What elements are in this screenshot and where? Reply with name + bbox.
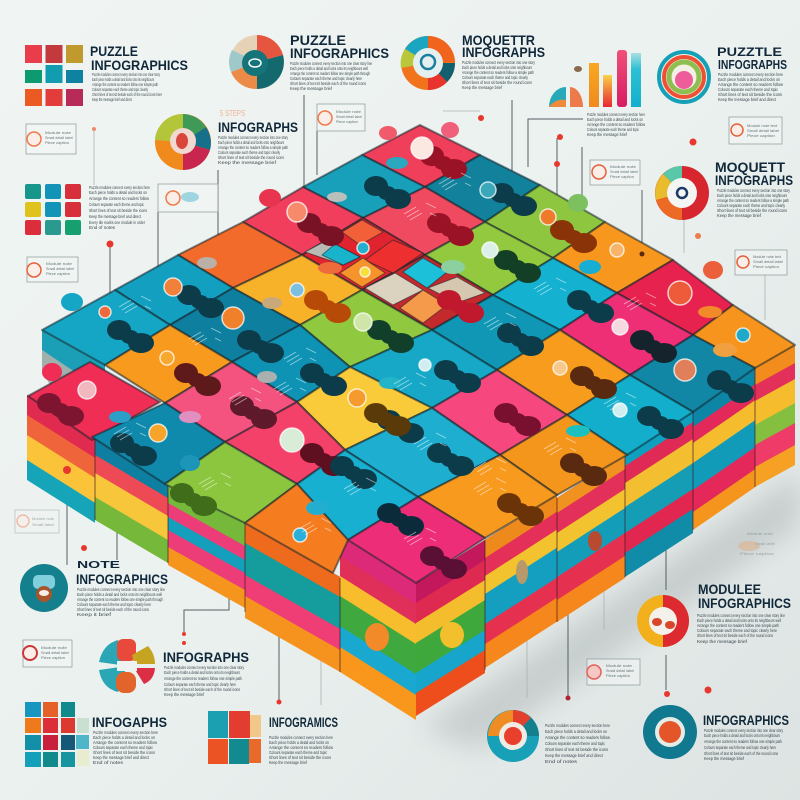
callout: top right: Piece caption	[747, 134, 775, 138]
heading: INFOGAPHS	[92, 714, 167, 730]
text block	[462, 60, 535, 91]
text block: End of notes	[93, 760, 124, 766]
heading: MOQUETT	[715, 159, 785, 175]
text block	[290, 61, 372, 92]
centre small pieces	[305, 220, 485, 323]
text block: Arrange the content so readers follow one simple path through	[77, 597, 163, 603]
callout: left lower: Piece caption	[46, 272, 70, 276]
pie chart	[401, 36, 455, 90]
text block: Arrange the content so readers follow a simple path	[218, 145, 288, 151]
panel: middle left infographics	[155, 109, 298, 170]
stack shadow	[420, 472, 800, 750]
text block: Colours separate each theme and topic	[545, 741, 605, 747]
heading: INFOGRAPHICS	[290, 45, 389, 61]
text block: Keep the message brief and direct	[718, 97, 777, 103]
callout: bottom centre: Small detail label	[606, 669, 634, 673]
callout: top centre left	[317, 104, 365, 131]
callout: top centre right: Piece caption	[610, 175, 634, 179]
panel: top right puzzle	[657, 45, 787, 104]
callout: right middle: Small detail label	[753, 260, 783, 264]
text block: Keep the message brief	[697, 639, 748, 645]
callout: bottom centre	[587, 659, 640, 685]
text block: Keep the message brief and direct	[89, 214, 141, 220]
text block: End of notes	[545, 759, 578, 765]
circle chart	[643, 705, 697, 759]
text block: Short lines of text sit beside the round icons	[218, 155, 284, 161]
text block: Colours separate each theme and topic clearly here	[164, 682, 236, 688]
callout: top centre left: Piece caption	[336, 120, 358, 124]
panel: bottom infographic tiles	[208, 711, 338, 766]
callout: lower left faded: Module note	[32, 517, 54, 521]
panel: right moquette infographics	[655, 159, 793, 220]
text block: Colours separate each theme and topic	[269, 750, 327, 756]
callout: faded lower right: Small label	[755, 542, 775, 546]
heading: PUZZTLE	[717, 45, 782, 59]
panel: bottom right infographics	[643, 705, 789, 762]
pie chart	[229, 35, 284, 89]
callout: lower left faded	[15, 510, 59, 533]
text block: Short lines of text sit beside each of the round icons here	[92, 92, 162, 98]
callout: lower left: Small detail label	[41, 651, 69, 655]
text block	[697, 613, 785, 645]
panel: petal infographics	[99, 639, 249, 698]
panel: bottom centre pie	[487, 710, 610, 765]
pie chart	[155, 114, 211, 170]
callout: left upper	[26, 124, 76, 154]
text block: Colours separate each theme and topic	[718, 87, 778, 93]
text block: Puzzle modules connect every section here	[545, 723, 610, 729]
text block: Puzzle modules connect every section here	[269, 735, 333, 741]
text block: Every tile marks one module in order	[89, 220, 145, 226]
callout lines	[67, 95, 765, 705]
text block	[93, 730, 158, 766]
callout: lower left faded: Small label	[32, 523, 54, 527]
text block: Each piece holds a detail and locks onto its neighbours well	[290, 66, 368, 72]
text block: Each piece holds a detail and locks on	[545, 729, 607, 735]
callout: right middle: Piece caption	[753, 265, 779, 269]
heading	[90, 43, 188, 73]
heading	[218, 109, 298, 135]
text block: Keep the message brief	[717, 213, 762, 219]
text block	[164, 665, 244, 698]
small marker	[574, 66, 582, 72]
puzzle pieces top surface	[28, 125, 795, 583]
heading	[715, 159, 793, 188]
panel: second tile grid	[25, 184, 150, 235]
text block	[717, 188, 790, 219]
text block: Puzzle modules connect every section into one clear story	[164, 665, 244, 671]
heading: MODULEE	[698, 581, 761, 597]
text block: Short lines of text sit beside the icons	[718, 92, 782, 98]
text block: Arrange the content so readers follow one simple path	[164, 676, 242, 682]
text block: Each piece holds a detail and locks onto its neighbours	[164, 670, 240, 676]
panel: module infographics	[637, 581, 791, 647]
callout: faded lower right: Module note	[747, 532, 773, 536]
text block: Puzzle modules connect every section here	[93, 730, 158, 736]
callout: right middle: Module note text	[753, 255, 781, 259]
outer and inner tabs	[42, 122, 737, 515]
text block: Arrange the content so readers follow a simple path	[462, 70, 534, 76]
text block: Puzzle modules connect every section into one story	[218, 135, 288, 141]
text block: Puzzle modules connect every section here	[89, 185, 150, 191]
panel: modular infographics	[401, 32, 545, 91]
callout: left lower: Module note	[46, 262, 72, 266]
callout: lower left	[23, 640, 72, 667]
piece badges	[78, 137, 750, 542]
text block: Each piece holds a detail and locks onto its neighbours	[92, 77, 154, 83]
text block: Colours separate each theme and topic	[587, 127, 639, 133]
text block: Arrange the content so readers follow	[269, 745, 333, 751]
text block: Colours separate each theme and topic clearly	[92, 87, 148, 93]
heading	[76, 560, 168, 587]
heading: MOQUETTR	[462, 32, 535, 48]
text block: Puzzle modules connect every section into one clear story line	[290, 61, 372, 67]
text block: Keep the message brief and direct	[545, 753, 604, 759]
text block	[92, 72, 162, 103]
heading: INFOGRAPHS	[462, 44, 545, 60]
piece scribbles	[114, 173, 656, 545]
text block: Short lines of text sit beside the icons	[89, 208, 147, 214]
text block	[545, 723, 610, 765]
text block: Short lines of text sit beside the round icons	[462, 80, 532, 86]
heading: PUZZLE	[290, 32, 346, 48]
text block	[218, 135, 288, 166]
marker dots top right	[63, 115, 712, 704]
text block: Each piece holds a detail and locks on	[587, 117, 643, 123]
text block: Keep it brief	[77, 612, 112, 618]
text block: Keep the message brief	[218, 160, 277, 166]
text block: Colours separate each theme and topic	[89, 202, 144, 208]
heading	[462, 32, 545, 60]
bar chart	[549, 50, 645, 138]
callout: bottom centre: Module note	[606, 664, 632, 668]
heading: NOTE	[77, 560, 121, 571]
text block: Arrange the content so readers follow	[718, 82, 783, 88]
tile group	[208, 711, 261, 764]
text block: Colours separate each theme and topic clearly	[462, 75, 528, 81]
callout: top centre right	[590, 160, 640, 185]
half circle chart	[549, 87, 583, 107]
panel: note infographics	[20, 560, 168, 618]
text block: Each piece holds a detail and locks onto its neighbours well	[77, 592, 162, 598]
callout: top centre right: Module note	[610, 165, 636, 169]
text block	[587, 112, 645, 138]
heading	[698, 581, 791, 611]
petal icon	[99, 639, 155, 693]
panel: top pie puzzle infographics	[229, 32, 389, 92]
text block: Puzzle modules connect every section into one story	[462, 60, 535, 66]
text block	[89, 185, 150, 231]
callout: left upper: Module note	[45, 131, 71, 135]
text block: Each piece holds a detail and locks on	[93, 735, 155, 741]
text block: Each piece holds a detail and locks on	[269, 740, 329, 746]
callout: faded lower right	[738, 532, 775, 556]
heading: INFOGRAPHICS	[91, 57, 188, 73]
tile grid	[25, 184, 81, 235]
callout: top centre right: Small detail label	[610, 170, 638, 174]
text block: Puzzle modules connect every section into one clear story line	[77, 587, 165, 593]
heading	[290, 32, 389, 61]
text block: Keep the message brief	[704, 756, 745, 762]
text block: Each piece holds a detail and locks onto neighbours	[462, 65, 532, 71]
callout: left centre	[158, 184, 218, 212]
text block: Short lines of text sit beside the icons	[545, 747, 608, 753]
callout: lower left: Module note	[41, 646, 67, 650]
callout: lower left: Piece caption	[41, 656, 65, 660]
text block: Arrange the content so readers follow	[545, 735, 610, 741]
text block: Puzzle modules connect every section here	[587, 112, 645, 118]
panel: top left puzzle infographics	[25, 43, 188, 106]
text block: Short lines of text sit beside the icons	[93, 750, 155, 756]
text block: Arrange the content so readers follow one simple path	[92, 82, 158, 88]
heading	[717, 45, 787, 72]
text block: Keep the message brief	[269, 760, 307, 766]
text block: Keep the message brief and direct	[92, 97, 132, 103]
seams on side faces	[95, 367, 755, 672]
concentric chart	[657, 50, 711, 104]
text block	[269, 735, 333, 766]
heading: PUZZLE	[90, 43, 138, 59]
text block: Arrange the content so readers follow	[93, 740, 157, 746]
text block	[718, 72, 783, 103]
text block: Keep the message brief	[462, 85, 503, 91]
text block: Colours separate each theme and topic clearly here	[290, 76, 362, 82]
right face columns	[416, 345, 795, 716]
callout: top centre left: Small detail label	[336, 115, 362, 119]
text block: Arrange the content so readers follow	[587, 122, 645, 128]
heading: INFOGRAPHS	[218, 119, 298, 135]
callout: faded lower right: Piece caption	[740, 552, 774, 556]
text block: Colours separate each theme and topic clearly here	[77, 602, 151, 608]
heading: INFOGRAPHICS	[76, 571, 168, 587]
grid icon	[25, 45, 83, 106]
text block: Short lines of text sit beside each of the round icons	[290, 81, 366, 87]
heading: 5 STEPS	[220, 109, 245, 118]
text block: Keep the message brief and direct	[93, 755, 150, 761]
callout: top right	[729, 117, 782, 144]
heading: INFOGRAPHS	[163, 649, 249, 665]
text block: Each piece holds a detail and locks on	[718, 77, 780, 83]
text block: Colours separate each theme and topic	[93, 745, 153, 751]
circle icon	[20, 564, 68, 612]
left face columns	[27, 395, 416, 720]
callout: bottom centre: Piece caption	[606, 674, 630, 678]
callout: right middle	[735, 250, 787, 275]
donut chart	[637, 595, 689, 647]
panel: bottom left tile grid	[25, 702, 167, 767]
text block: Each piece holds a detail and locks onto neighbours	[218, 140, 284, 146]
donut chart	[655, 166, 709, 220]
puzzle holes	[37, 146, 754, 579]
text block: Keep the message brief	[164, 692, 205, 698]
text block: End of notes	[89, 225, 116, 231]
callout: left upper: Small detail label	[45, 136, 73, 140]
callout: top centre left: Module note	[336, 110, 361, 114]
callout: left lower: Small detail label	[46, 267, 74, 271]
text block	[704, 728, 783, 762]
text block: Keep the message brief	[587, 132, 628, 138]
text block: Short lines of text sit beside the icons	[269, 755, 331, 761]
text block: Arrange the content so readers follow one simple path through	[290, 71, 370, 77]
text block: Puzzle modules connect every section into one clear story	[92, 72, 160, 78]
callout: top right: Module note text	[747, 124, 777, 128]
text block: Each piece holds a detail and locks on	[89, 190, 147, 196]
puzzle stack	[27, 122, 795, 720]
callout: left upper: Piece caption	[45, 141, 69, 145]
tile grid	[25, 702, 89, 767]
pie chart	[487, 710, 539, 762]
text block: Short lines of text sit beside each of the round icons	[164, 687, 240, 693]
side balls	[365, 531, 602, 651]
text block	[77, 587, 165, 618]
back left teal side	[42, 330, 105, 400]
callout: left lower	[27, 257, 78, 282]
text block: Arrange the content so readers follow	[89, 196, 149, 202]
text block: Colours separate each theme and topic clearly	[218, 150, 280, 156]
heading: INFOGRAMICS	[269, 714, 338, 730]
text block: Keep the message brief	[290, 86, 333, 92]
text block: Short lines of text sit beside each of the round icons	[77, 607, 149, 613]
callout: top right: Small detail label	[747, 129, 779, 133]
